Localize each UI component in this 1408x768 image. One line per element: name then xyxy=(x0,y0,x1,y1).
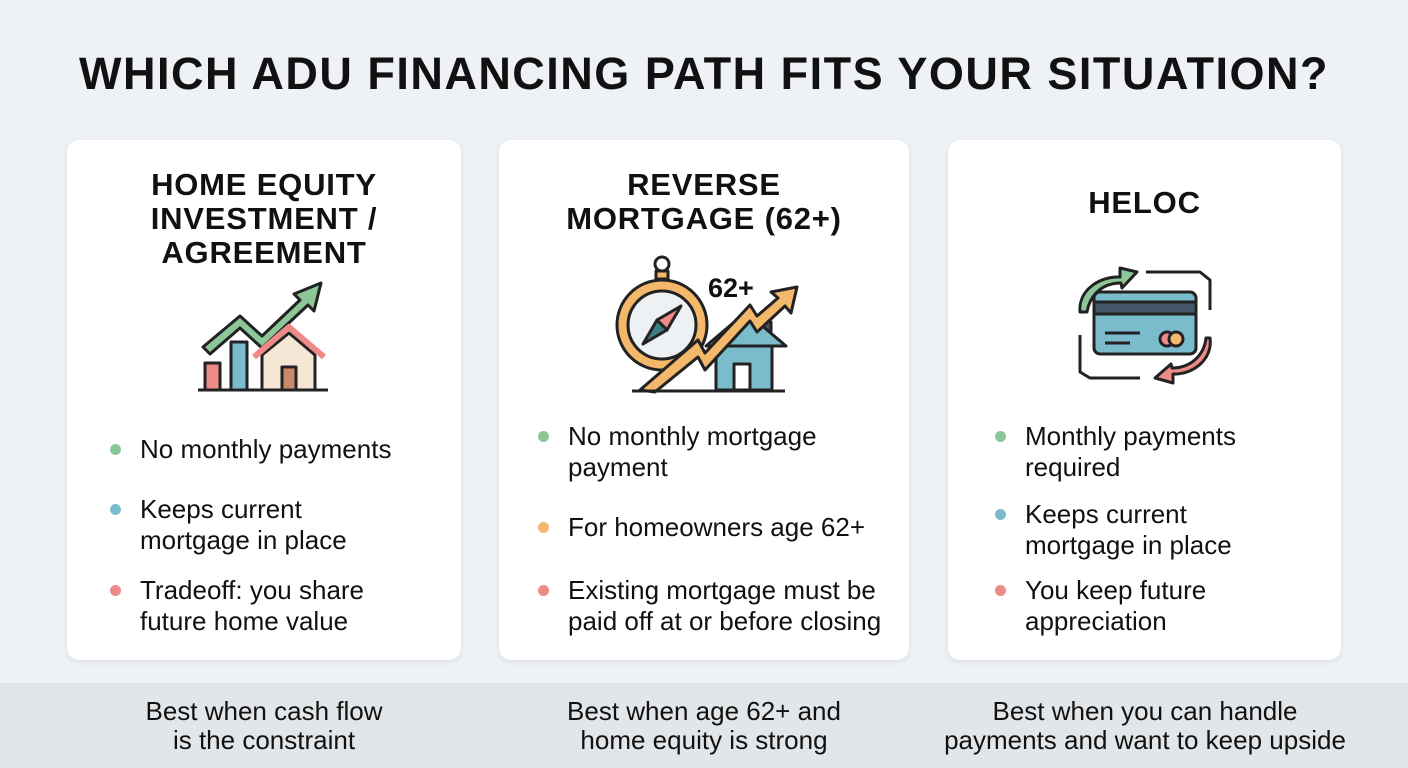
panel: home equity investment xyxy=(67,140,461,660)
panel: reverse mortgage: Existing mortgage must be xyxy=(568,575,876,605)
bottom strip xyxy=(0,683,1408,768)
panel: reverse mortgage: For homeowners age 62+ xyxy=(568,512,865,542)
bullet 1 xyxy=(538,421,817,482)
panel: HELOC: Monthly payments xyxy=(1025,421,1236,451)
panel: HELOC: Keeps current xyxy=(1025,499,1187,529)
panel: home equity investment: No monthly payments xyxy=(140,434,391,464)
caption: HELOC: Best when you can handle xyxy=(992,696,1298,726)
heading: HELOC xyxy=(1088,185,1201,220)
panel: home equity investment: mortgage in place xyxy=(140,525,347,555)
heading xyxy=(151,167,377,270)
bullet 1 xyxy=(995,421,1236,482)
heading: MORTGAGE (62+) xyxy=(566,201,842,236)
caption: reverse mortgage: home equity is strong xyxy=(580,725,828,755)
bullet 2 xyxy=(110,494,347,555)
caption: home equity: is the constraint xyxy=(173,725,355,755)
bullet 1 xyxy=(110,434,391,464)
icon: chart with house xyxy=(198,282,328,392)
caption: home equity xyxy=(145,696,383,755)
panel: HELOC xyxy=(948,140,1341,660)
caption: reverse mortgage: Best when age 62+ and xyxy=(567,696,841,726)
panel: HELOC: You keep future xyxy=(1025,575,1206,605)
heading: AGREEMENT xyxy=(161,235,367,270)
heading: REVERSE xyxy=(627,167,781,202)
title: WHICH ADU FINANCING PATH FITS YOUR SITUATION? xyxy=(79,48,1329,99)
panel: HELOC: appreciation xyxy=(1025,606,1167,636)
bullet 3 xyxy=(995,575,1206,636)
icon: stopwatch with arrow and house xyxy=(616,256,798,394)
heading: HOME EQUITY xyxy=(151,167,377,202)
icon: stopwatch with arrow and house: 62+ xyxy=(708,273,754,303)
panel: reverse mortgage: No monthly mortgage xyxy=(568,421,817,451)
bullet 2 xyxy=(538,512,865,542)
panel: HELOC: required xyxy=(1025,452,1120,482)
icon: credit card with arrows xyxy=(1078,266,1212,384)
bullet 3 xyxy=(538,575,881,636)
panel: reverse mortgage: paid off at or before closing xyxy=(568,606,881,636)
heading: INVESTMENT / xyxy=(151,201,377,236)
panel: home equity investment: Keeps current xyxy=(140,494,302,524)
panel: home equity investment: future home value xyxy=(140,606,348,636)
caption: reverse mortgage xyxy=(567,696,841,755)
panel: home equity investment: Tradeoff: you share xyxy=(140,575,364,605)
panel: HELOC: mortgage in place xyxy=(1025,530,1232,560)
caption: HELOC xyxy=(944,696,1346,755)
heading xyxy=(566,167,842,236)
caption: HELOC: payments and want to keep upside xyxy=(944,725,1346,755)
panel: reverse mortgage xyxy=(499,140,909,660)
bullet 2 xyxy=(995,499,1232,560)
bullet 3 xyxy=(110,575,364,636)
panel: reverse mortgage: payment xyxy=(568,452,668,482)
caption: home equity: Best when cash flow xyxy=(145,696,382,726)
